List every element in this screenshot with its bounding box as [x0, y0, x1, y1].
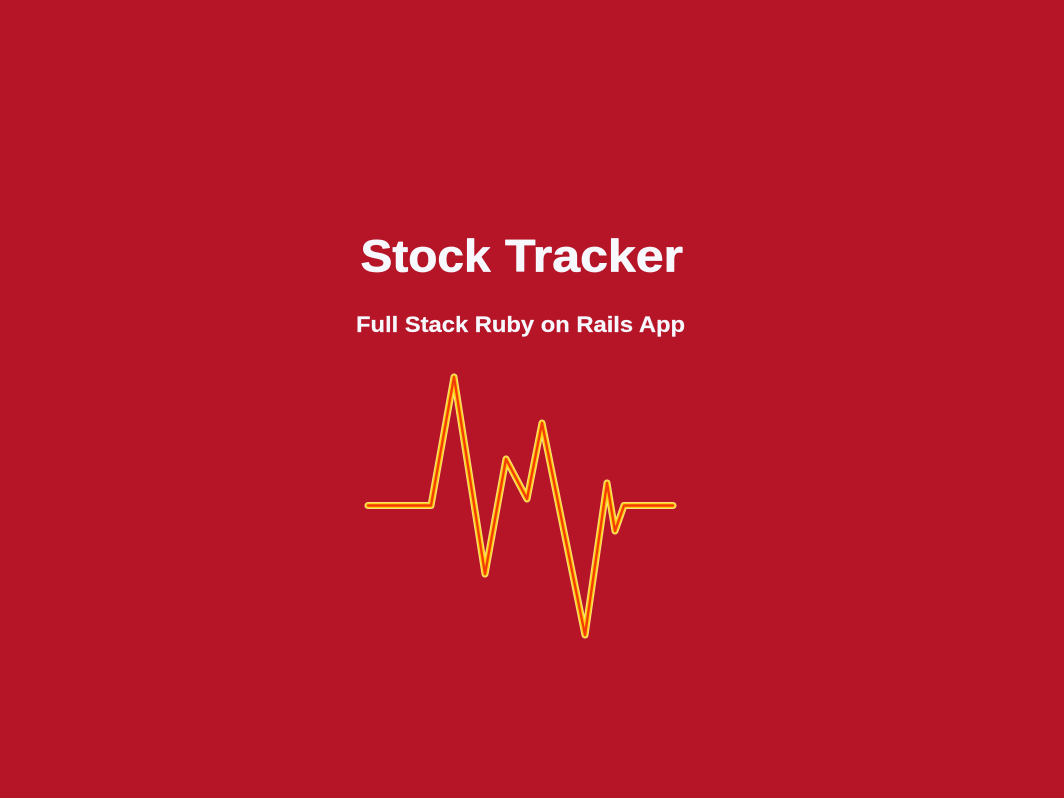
- subtitle: Full Stack Ruby on Rails App: [356, 312, 685, 337]
- icon: stock pulse line: [368, 377, 673, 635]
- title: Stock: [360, 230, 492, 282]
- title: [360, 230, 683, 282]
- title: Tracker: [505, 230, 683, 282]
